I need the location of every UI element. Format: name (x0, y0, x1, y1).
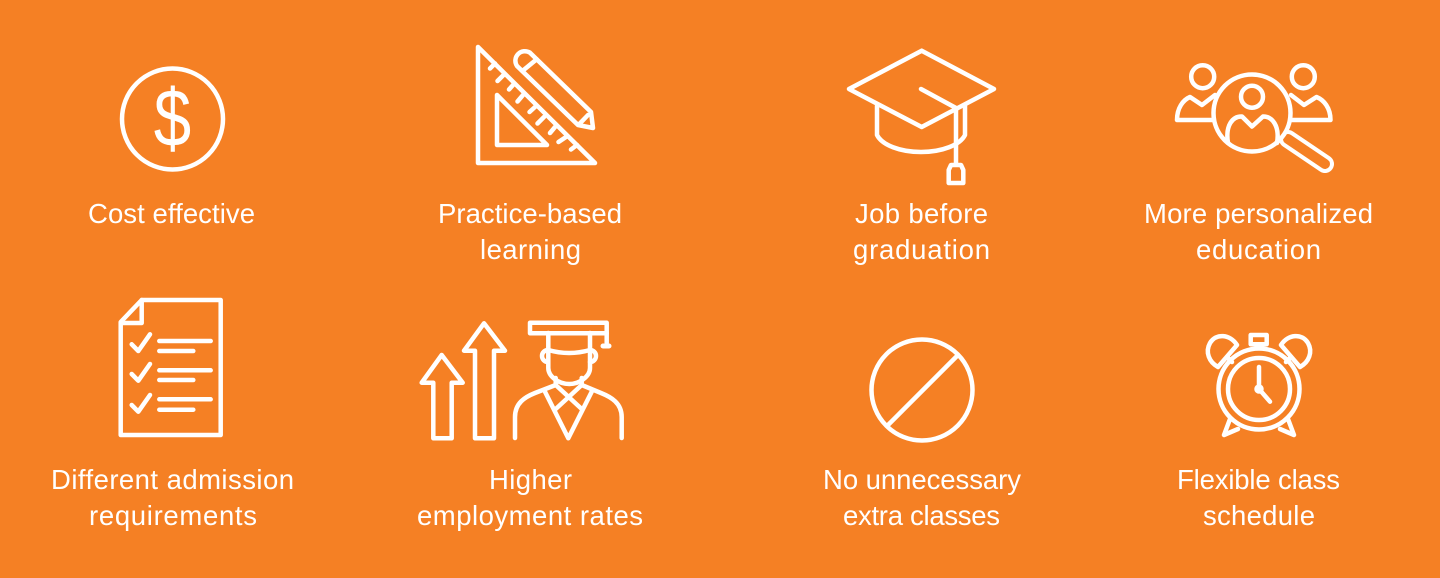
panel: more personalized education (1144, 65, 1373, 265)
label: job before graduation (853, 198, 990, 265)
panel: cost effective (88, 68, 255, 229)
icon: dollar coin: $ (154, 72, 191, 163)
label: different admission requirements: Different admission (51, 464, 294, 495)
label: more personalized education: education (1196, 234, 1321, 265)
icon: prohibition sign (872, 340, 972, 440)
label: higher employment rates (417, 464, 643, 531)
icon: set square and pencil (478, 47, 595, 163)
label: flexible class schedule (1177, 464, 1340, 531)
label: higher employment rates: employment rates (417, 500, 643, 531)
panel: job before graduation (849, 51, 994, 265)
label: more personalized education (1144, 198, 1373, 265)
panel: flexible class schedule (1177, 335, 1340, 531)
label: different admission requirements: requirements (89, 500, 257, 531)
label: no unnecessary extra classes: extra classes (843, 500, 1000, 531)
panel: higher employment rates (417, 323, 643, 531)
label: flexible class schedule: Flexible class (1177, 464, 1340, 495)
icon: people under magnifying glass (1177, 65, 1330, 164)
label: practice-based learning: Practice-based (438, 198, 622, 229)
label: practice-based learning (438, 198, 622, 265)
label: job before graduation: Job before (855, 198, 988, 229)
label: job before graduation: graduation (853, 234, 990, 265)
label: more personalized education: More personalized (1144, 198, 1373, 229)
panel: different admission requirements (51, 300, 294, 531)
label: no unnecessary extra classes (823, 464, 1021, 531)
label: flexible class schedule: schedule (1203, 500, 1315, 531)
label: no unnecessary extra classes: No unnecessary (823, 464, 1021, 495)
icon: graduation cap (849, 51, 994, 183)
icon: dollar coin (122, 68, 223, 170)
label: practice-based learning: learning (480, 234, 581, 265)
icon: checklist document (121, 300, 221, 435)
panel: practice-based learning (438, 47, 622, 265)
label: higher employment rates: Higher (489, 464, 572, 495)
label: different admission requirements (51, 464, 294, 531)
icon: rising arrows and graduate (422, 323, 622, 438)
label: cost effective: Cost effective (88, 198, 255, 229)
panel: no unnecessary extra classes (823, 340, 1021, 531)
icon: alarm clock (1208, 335, 1310, 435)
